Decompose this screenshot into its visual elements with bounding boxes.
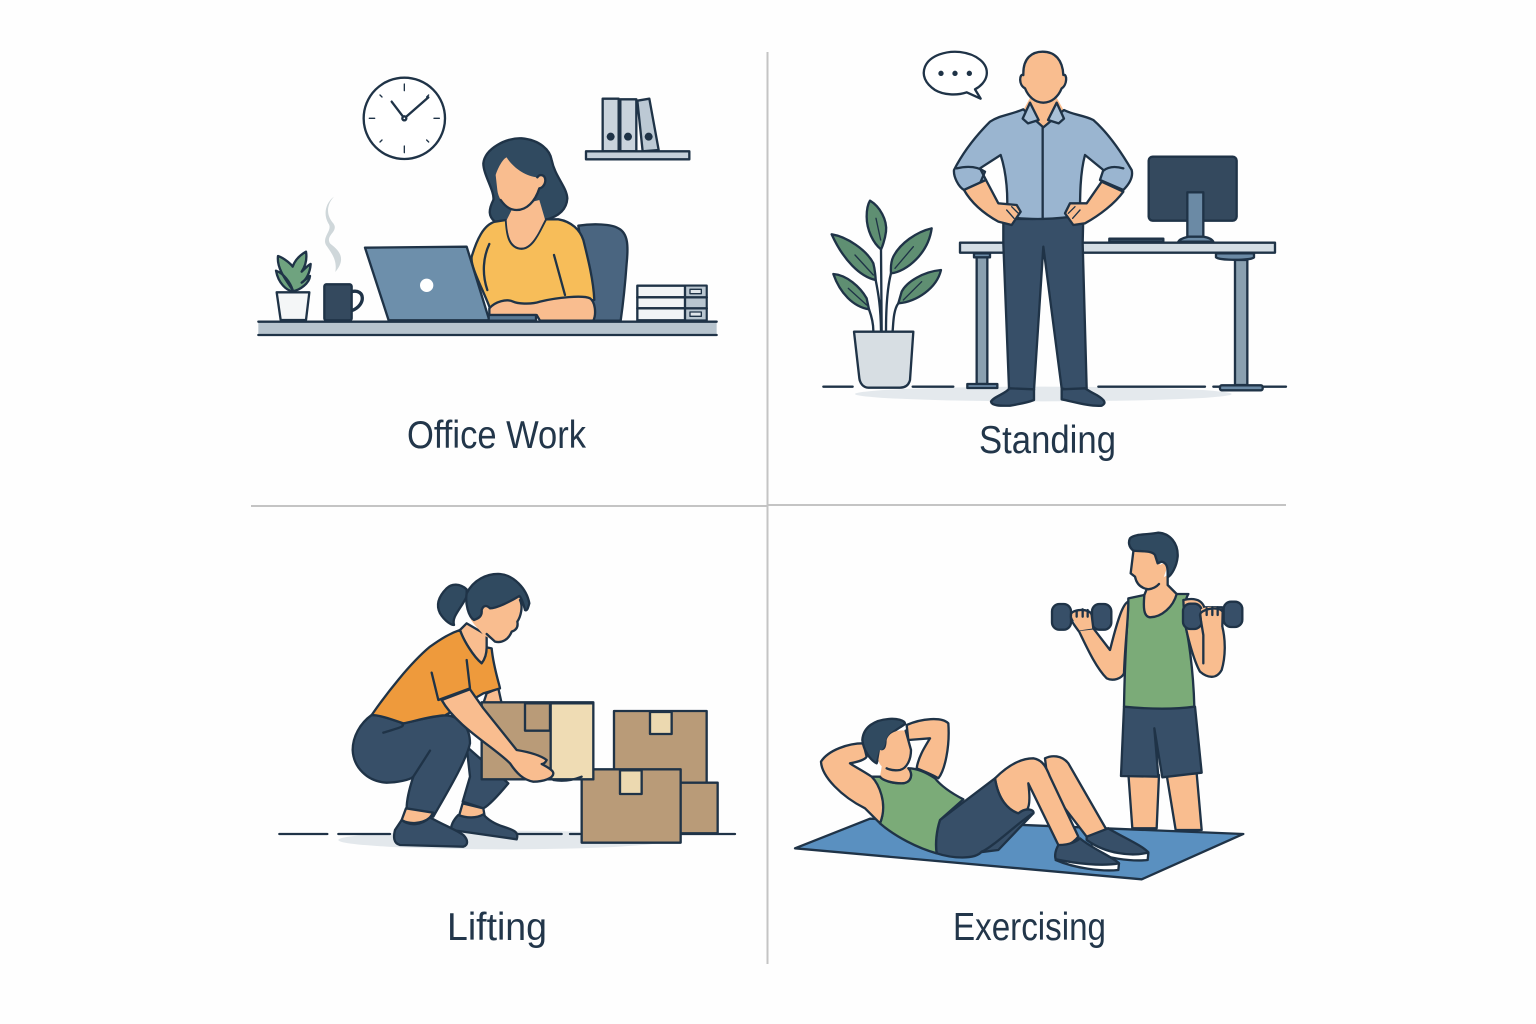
icon: potted plant bbox=[276, 252, 311, 320]
woman: front shoe bbox=[394, 817, 467, 847]
speech bubble bbox=[924, 52, 987, 99]
woman: shirt bbox=[372, 630, 500, 723]
stacked boxes bbox=[582, 711, 718, 843]
woman: forearm bbox=[489, 297, 595, 321]
man: shirt bbox=[954, 109, 1132, 219]
icon: coffee mug bbox=[324, 284, 362, 320]
lying man: near shoe bbox=[1055, 838, 1119, 870]
man: collar bbox=[957, 103, 1123, 218]
man: trousers bbox=[1003, 215, 1087, 390]
lying man: face bbox=[878, 730, 911, 770]
lying man: under thigh bbox=[972, 803, 1033, 853]
icon: stacked files bbox=[637, 286, 707, 320]
icon: wall clock bbox=[364, 78, 445, 159]
icon: shelf with binders bbox=[586, 99, 689, 159]
man: forearms and hands bbox=[964, 180, 1123, 225]
standing desk bbox=[960, 243, 1275, 390]
illustration: woman lifting boxes bbox=[279, 574, 735, 849]
office chair bbox=[578, 224, 627, 321]
lying man: far shoe bbox=[1087, 828, 1148, 860]
woman: shirt bbox=[472, 219, 594, 308]
lying man: raised arms bbox=[821, 719, 949, 823]
standing man: legs bbox=[1128, 773, 1202, 830]
panel: exercising bbox=[795, 533, 1243, 949]
icon: left dumbbell bbox=[1052, 604, 1111, 631]
laptop bbox=[365, 247, 536, 321]
woman: ankle bbox=[402, 808, 433, 823]
floor shadow bbox=[338, 831, 668, 849]
standing man: left arm bbox=[1078, 602, 1128, 680]
woman: face bbox=[496, 157, 545, 210]
lying man: face and neck lines bbox=[880, 731, 911, 783]
lying man: near leg bbox=[995, 758, 1078, 846]
woman: hair bbox=[483, 138, 567, 222]
woman: front leg bbox=[353, 715, 470, 817]
lying man: hair bbox=[862, 719, 905, 763]
standing man: right arm bbox=[1183, 599, 1225, 677]
label: office work: Office Work bbox=[407, 414, 586, 457]
label: lifting: Lifting bbox=[447, 906, 547, 949]
exercise mat bbox=[795, 819, 1243, 879]
illustration: sit-ups and dumbbell curls bbox=[795, 533, 1243, 879]
standing man: neck bbox=[1144, 575, 1177, 617]
standing man: shorts bbox=[1121, 707, 1202, 777]
panel: lifting bbox=[279, 574, 735, 949]
lying man: tank top bbox=[872, 768, 963, 853]
lying man: shorts bbox=[936, 778, 1034, 857]
floor shadow bbox=[855, 387, 1232, 401]
standing man: face bbox=[1131, 550, 1166, 589]
illustration: woman working at a laptop bbox=[258, 78, 717, 335]
potted plant bbox=[832, 201, 941, 388]
man: shoes bbox=[991, 388, 1104, 406]
icon: right dumbbell bbox=[1183, 602, 1242, 663]
monitor bbox=[1109, 157, 1237, 242]
panel: standing bbox=[823, 52, 1286, 462]
label: standing: Standing bbox=[979, 419, 1116, 462]
woman: jaw line bbox=[501, 175, 545, 210]
lying man: far leg bbox=[1045, 756, 1107, 837]
woman: face bbox=[468, 595, 522, 642]
woman: back leg bbox=[451, 747, 517, 839]
man: head bbox=[1020, 52, 1066, 103]
standing man: hair bbox=[1129, 533, 1178, 577]
woman: neck bbox=[507, 200, 545, 248]
illustration: man at a standing desk bbox=[823, 52, 1286, 406]
woman: shirt seams bbox=[484, 244, 565, 295]
panel: office work bbox=[258, 78, 717, 457]
standing man: tank top bbox=[1124, 594, 1194, 709]
man: neck bbox=[1023, 97, 1064, 127]
woman: sleeve and arm bbox=[383, 660, 553, 782]
woman: profile line bbox=[487, 600, 522, 642]
woman: far arm bbox=[483, 688, 502, 703]
woman: ponytail bbox=[438, 585, 467, 625]
standing man: jaw and neck lines bbox=[1131, 552, 1177, 595]
woman: hair bbox=[466, 574, 529, 620]
icon: steam bbox=[325, 197, 341, 272]
held box bbox=[482, 702, 593, 781]
desk bbox=[258, 322, 717, 335]
woman: neck bbox=[460, 623, 487, 663]
lying man: neck bbox=[880, 760, 911, 783]
label: exercising: Exercising bbox=[953, 906, 1106, 949]
